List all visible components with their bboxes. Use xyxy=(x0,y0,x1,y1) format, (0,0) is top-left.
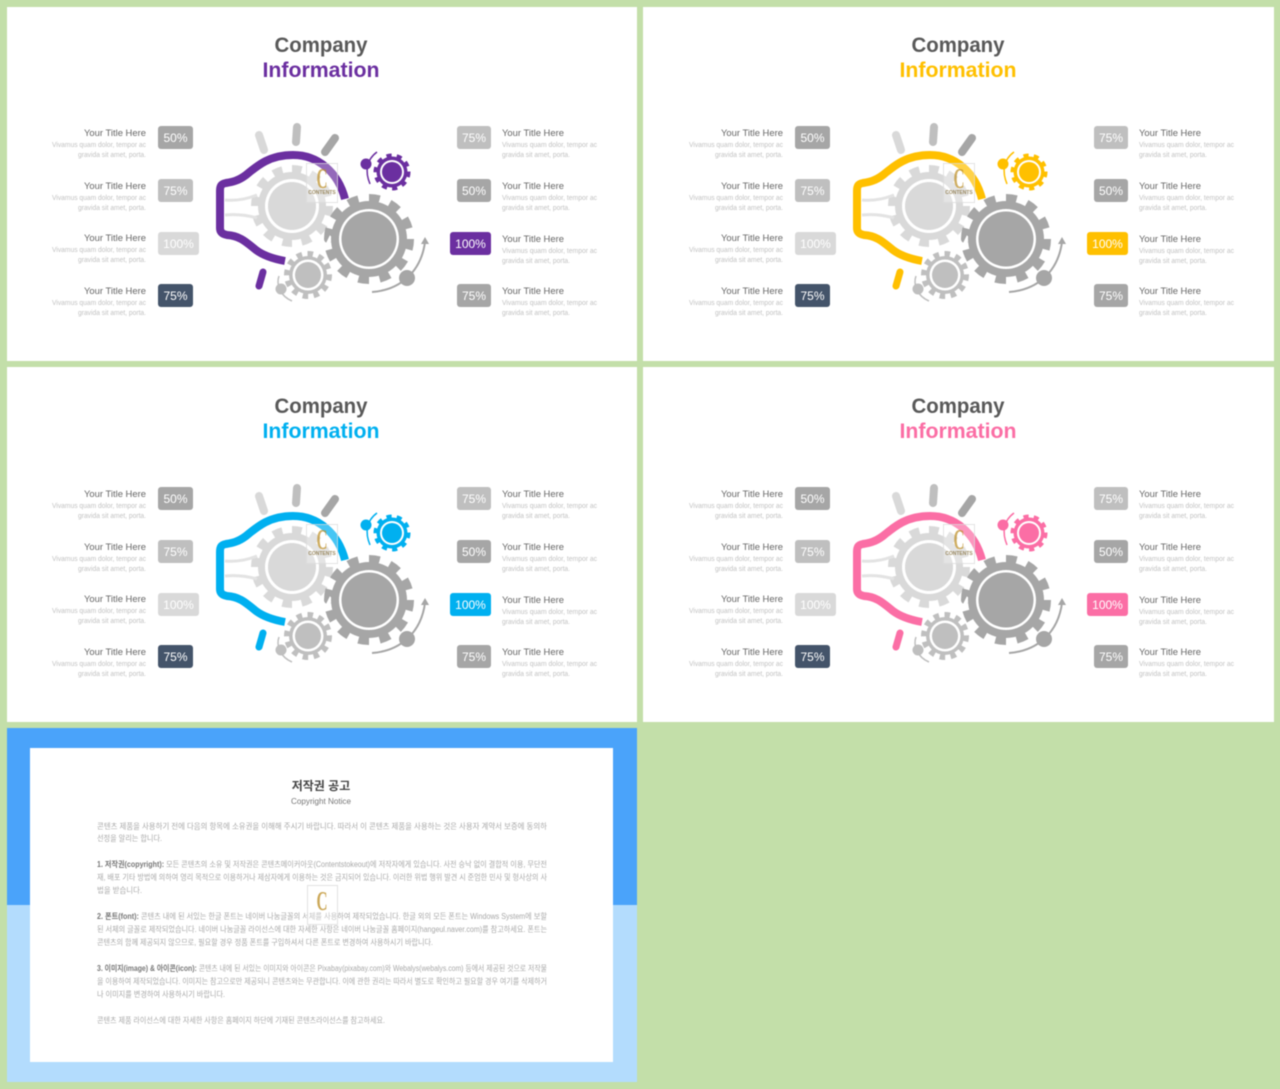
right list: 75% xyxy=(1099,131,1123,145)
left list: Your Title Here xyxy=(721,594,783,605)
watermark logo xyxy=(944,524,974,564)
left list: gravida sit amet, porta. xyxy=(715,618,783,625)
left list: 50% xyxy=(163,492,188,506)
left list xyxy=(52,126,199,317)
copyright section 1: 1. 저작권(copyright): 모든 콘텐츠의 소유 및 저작권은 콘텐츠메이커아웃(Contentstokeout)에 저작자에게 있습니다. 사전 승낙 없이 결합적 이용, 무단전 xyxy=(97,859,547,869)
icon: light bulb with gears xyxy=(857,488,1066,662)
right list: gravida sit amet, porta. xyxy=(502,671,570,678)
left list: Vivamus quam dolor, tempor ac xyxy=(52,608,146,615)
right list: 75% xyxy=(1099,650,1123,664)
copyright section 1: 법을 받습니다. xyxy=(97,885,142,895)
left list: gravida sit amet, porta. xyxy=(78,257,146,264)
left list xyxy=(52,487,199,678)
right list: Your Title Here xyxy=(502,647,564,658)
left list: Vivamus quam dolor, tempor ac xyxy=(689,503,783,510)
left list: Vivamus quam dolor, tempor ac xyxy=(689,608,783,615)
right list xyxy=(1087,487,1234,678)
left list: Vivamus quam dolor, tempor ac xyxy=(689,195,783,202)
panel: yellow company information xyxy=(643,7,1274,361)
watermark logo: CONTENTS xyxy=(945,551,973,557)
right list: gravida sit amet, porta. xyxy=(502,152,570,159)
left list: Vivamus quam dolor, tempor ac xyxy=(689,661,783,668)
left list: Your Title Here xyxy=(84,181,146,192)
right list: gravida sit amet, porta. xyxy=(1139,152,1207,159)
left list: gravida sit amet, porta. xyxy=(715,152,783,159)
left list: Vivamus quam dolor, tempor ac xyxy=(689,142,783,149)
watermark logo: C xyxy=(954,525,964,556)
left list: 75% xyxy=(800,545,825,559)
right list: 50% xyxy=(1099,184,1123,198)
title: Company xyxy=(912,34,1005,57)
right list: Vivamus quam dolor, tempor ac xyxy=(502,661,597,668)
left list: Your Title Here xyxy=(721,233,783,244)
watermark logo xyxy=(308,886,338,924)
left list: gravida sit amet, porta. xyxy=(78,152,146,159)
copyright intro: 콘텐츠 제품을 사용하기 전에 다음의 항목에 소유권을 이해해 주시기 바랍니다. 따라서 이 콘텐츠 제품을 사용하는 것은 사용자 계약서 보증에 동의하 xyxy=(97,821,548,831)
left list: Your Title Here xyxy=(721,181,783,192)
panel: purple company information xyxy=(7,7,637,361)
left list: Vivamus quam dolor, tempor ac xyxy=(52,142,146,149)
right list: Vivamus quam dolor, tempor ac xyxy=(1139,142,1234,149)
left list: Your Title Here xyxy=(721,542,783,553)
left list: Vivamus quam dolor, tempor ac xyxy=(52,195,146,202)
left list: Your Title Here xyxy=(84,647,146,658)
left list: gravida sit amet, porta. xyxy=(715,513,783,520)
left list: 75% xyxy=(163,184,188,198)
watermark logo: CONTENTS xyxy=(945,190,973,196)
right list: Vivamus quam dolor, tempor ac xyxy=(502,142,597,149)
copyright section 2 xyxy=(97,911,548,947)
left list: gravida sit amet, porta. xyxy=(78,671,146,678)
title: Information xyxy=(900,420,1016,443)
title: Company xyxy=(274,34,368,57)
right list: gravida sit amet, porta. xyxy=(1139,205,1207,212)
panel: pink company information xyxy=(643,367,1274,722)
right list: Your Title Here xyxy=(1139,181,1201,192)
right list: Your Title Here xyxy=(1139,128,1201,139)
left list: gravida sit amet, porta. xyxy=(715,566,783,573)
left list: Vivamus quam dolor, tempor ac xyxy=(52,503,146,510)
left list: 75% xyxy=(800,650,825,664)
left list: Vivamus quam dolor, tempor ac xyxy=(52,247,146,254)
copyright section 1: 재, 배포 기타 방법에 의하여 영리 목적으로 이용하거나 제삼자에게 이용하는 것은 금지되어 있습니다. 이러한 위법 행위 발견 시 준엄한 민사 및 형사상의 사 xyxy=(97,872,548,882)
copyright section 3: 3. 이미지(image) & 아이콘(icon): 콘텐츠 내에 된 서있는 이미지와 아이콘은 Pixabay(pixabay.com)와 Webalys(webalys.com) 등에서 제공된 것으로 저작물 xyxy=(97,963,547,973)
right list: gravida sit amet, porta. xyxy=(502,566,570,573)
left list: 100% xyxy=(163,237,194,251)
title: Information xyxy=(262,420,380,443)
right list: Your Title Here xyxy=(502,181,564,192)
left list: 50% xyxy=(163,131,188,145)
copyright intro: 선정을 알리는 합니다. xyxy=(97,833,162,843)
right list: Your Title Here xyxy=(502,234,564,245)
right list: Your Title Here xyxy=(502,286,564,297)
right list: gravida sit amet, porta. xyxy=(502,205,570,212)
right list: 50% xyxy=(1099,545,1123,559)
left list: 75% xyxy=(163,650,188,664)
left list: Your Title Here xyxy=(721,489,783,500)
left list: 100% xyxy=(163,598,194,612)
left list: Vivamus quam dolor, tempor ac xyxy=(52,661,146,668)
left list: 75% xyxy=(800,289,825,303)
copyright section 3: 을 이용하여 제작되었습니다. 이미지는 참고으로만 제공되니 콘텐츠와는 무관합니다. 이에 관한 권리는 따라서 별도로 확인하고 필요할 경우 여기를 삭제하거 xyxy=(97,976,547,986)
right list: Vivamus quam dolor, tempor ac xyxy=(1139,248,1234,255)
right list: Vivamus quam dolor, tempor ac xyxy=(1139,503,1234,510)
title: Company xyxy=(912,395,1005,418)
left list: Your Title Here xyxy=(721,647,783,658)
left list: Your Title Here xyxy=(84,128,146,139)
right list: 75% xyxy=(462,650,486,664)
copyright footer note: 콘텐츠 제품 라이선스에 대한 자세한 사항은 홈페이지 하단에 기재된 콘텐츠라이선스를 참고하세요. xyxy=(97,1015,385,1025)
right list: Vivamus quam dolor, tempor ac xyxy=(502,503,597,510)
left list: Vivamus quam dolor, tempor ac xyxy=(689,556,783,563)
title xyxy=(262,34,380,82)
watermark logo: C xyxy=(316,164,328,195)
right list: Your Title Here xyxy=(502,542,564,553)
watermark logo xyxy=(306,164,338,202)
right list: Vivamus quam dolor, tempor ac xyxy=(502,195,597,202)
right list: gravida sit amet, porta. xyxy=(1139,310,1207,317)
copyright intro xyxy=(97,821,548,843)
copyright section 2: 된 서체의 글꼴로 제작되었습니다. 네이버 나눔글꼴 라이선스에 대한 자세한 사항은 네이버 나눔글꼴 홈페이지(hangeul.naver.com)를 참고하세요. 폰트는 xyxy=(97,924,547,934)
left list: 100% xyxy=(800,598,831,612)
right list: Your Title Here xyxy=(1139,234,1201,245)
copyright heading: 저작권 공고 xyxy=(292,778,350,793)
right list: Your Title Here xyxy=(1139,647,1201,658)
right list: gravida sit amet, porta. xyxy=(1139,258,1207,265)
left list: Your Title Here xyxy=(721,286,783,297)
left list: gravida sit amet, porta. xyxy=(715,205,783,212)
right list: Vivamus quam dolor, tempor ac xyxy=(1139,300,1234,307)
right list: 75% xyxy=(462,131,486,145)
right list: Your Title Here xyxy=(502,128,564,139)
title: Information xyxy=(900,59,1016,82)
left list: Your Title Here xyxy=(721,128,783,139)
watermark logo: CONTENTS xyxy=(308,551,336,557)
right list: 75% xyxy=(1099,289,1123,303)
left list: gravida sit amet, porta. xyxy=(78,618,146,625)
right list xyxy=(450,126,597,317)
copyright section 3 xyxy=(97,963,547,999)
watermark logo: C xyxy=(316,886,328,916)
right list: Your Title Here xyxy=(1139,595,1201,606)
panel: copyright notice xyxy=(7,728,637,1082)
right list: 100% xyxy=(1092,237,1123,251)
right list: gravida sit amet, porta. xyxy=(1139,566,1207,573)
right list: Vivamus quam dolor, tempor ac xyxy=(502,556,597,563)
right list: Vivamus quam dolor, tempor ac xyxy=(502,300,597,307)
watermark logo xyxy=(306,524,338,564)
watermark logo: C xyxy=(954,164,964,195)
left list: gravida sit amet, porta. xyxy=(78,205,146,212)
left list: gravida sit amet, porta. xyxy=(78,513,146,520)
right list: Your Title Here xyxy=(1139,489,1201,500)
right list: gravida sit amet, porta. xyxy=(502,513,570,520)
left list: 75% xyxy=(163,289,188,303)
right list xyxy=(1087,126,1234,317)
copyright section 3: 나 이미지를 변경하여 사용하시기 바랍니다. xyxy=(97,989,225,999)
right list: Your Title Here xyxy=(502,489,564,500)
right list: 100% xyxy=(455,598,486,612)
right list: gravida sit amet, porta. xyxy=(502,310,570,317)
left list: Your Title Here xyxy=(84,489,146,500)
left list: gravida sit amet, porta. xyxy=(715,671,783,678)
left list: Your Title Here xyxy=(84,233,146,244)
right list: 75% xyxy=(462,289,486,303)
right list: gravida sit amet, porta. xyxy=(1139,513,1207,520)
left list: 50% xyxy=(800,131,825,145)
left list: Vivamus quam dolor, tempor ac xyxy=(689,247,783,254)
right list: Your Title Here xyxy=(1139,286,1201,297)
left list: 100% xyxy=(800,237,831,251)
left list: Vivamus quam dolor, tempor ac xyxy=(52,556,146,563)
right list: Your Title Here xyxy=(1139,542,1201,553)
left list: Your Title Here xyxy=(84,542,146,553)
title xyxy=(900,34,1016,82)
right list: gravida sit amet, porta. xyxy=(502,258,570,265)
copyright heading: Copyright Notice xyxy=(291,796,351,806)
right list: Vivamus quam dolor, tempor ac xyxy=(1139,195,1234,202)
right list: 75% xyxy=(462,492,486,506)
left list: 75% xyxy=(163,545,188,559)
left list: 50% xyxy=(800,492,825,506)
panel: blue company information xyxy=(7,367,637,722)
right list: Your Title Here xyxy=(502,595,564,606)
left list: Vivamus quam dolor, tempor ac xyxy=(52,300,146,307)
right list: 75% xyxy=(1099,492,1123,506)
icon: light bulb with gears xyxy=(857,127,1066,301)
title xyxy=(900,395,1016,443)
left list: Vivamus quam dolor, tempor ac xyxy=(689,300,783,307)
right list: gravida sit amet, porta. xyxy=(502,619,570,626)
right list: 50% xyxy=(462,545,486,559)
title: Company xyxy=(274,395,368,418)
right list: 50% xyxy=(462,184,486,198)
right list: 100% xyxy=(455,237,486,251)
icon: light bulb with gears xyxy=(220,127,429,301)
right list: Vivamus quam dolor, tempor ac xyxy=(502,609,597,616)
left list: Your Title Here xyxy=(84,594,146,605)
right list: Vivamus quam dolor, tempor ac xyxy=(502,248,597,255)
left list: gravida sit amet, porta. xyxy=(78,566,146,573)
copyright heading xyxy=(291,778,351,806)
left list xyxy=(689,126,836,317)
right list: Vivamus quam dolor, tempor ac xyxy=(1139,609,1234,616)
watermark logo xyxy=(944,164,974,202)
left list: gravida sit amet, porta. xyxy=(715,310,783,317)
copyright section 2: 콘텐츠의 함께 제공되지 않으므로, 필요할 경우 정품 폰트를 구입하셔서 다른 폰트로 변경하여 사용하시기 바랍니다. xyxy=(97,937,433,947)
left list xyxy=(689,487,836,678)
right list: gravida sit amet, porta. xyxy=(1139,671,1207,678)
left list: gravida sit amet, porta. xyxy=(78,310,146,317)
watermark logo: CONTENTS xyxy=(308,190,336,196)
title xyxy=(262,395,380,443)
right list: gravida sit amet, porta. xyxy=(1139,619,1207,626)
right list xyxy=(450,487,597,678)
copyright section 2: 2. 폰트(font): 콘텐츠 내에 된 서있는 한글 폰트는 네이버 나눔글꼴의 서체를 사용하여 제작되었습니다. 한글 외의 모든 폰트는 Windows System에 보할 xyxy=(97,911,548,921)
left list: 75% xyxy=(800,184,825,198)
watermark logo: C xyxy=(316,525,328,556)
right list: Vivamus quam dolor, tempor ac xyxy=(1139,556,1234,563)
title: Information xyxy=(262,59,380,82)
copyright section 1 xyxy=(97,859,548,895)
icon: light bulb with gears xyxy=(220,488,429,662)
right list: Vivamus quam dolor, tempor ac xyxy=(1139,661,1234,668)
left list: gravida sit amet, porta. xyxy=(715,257,783,264)
left list: Your Title Here xyxy=(84,286,146,297)
right list: 100% xyxy=(1092,598,1123,612)
